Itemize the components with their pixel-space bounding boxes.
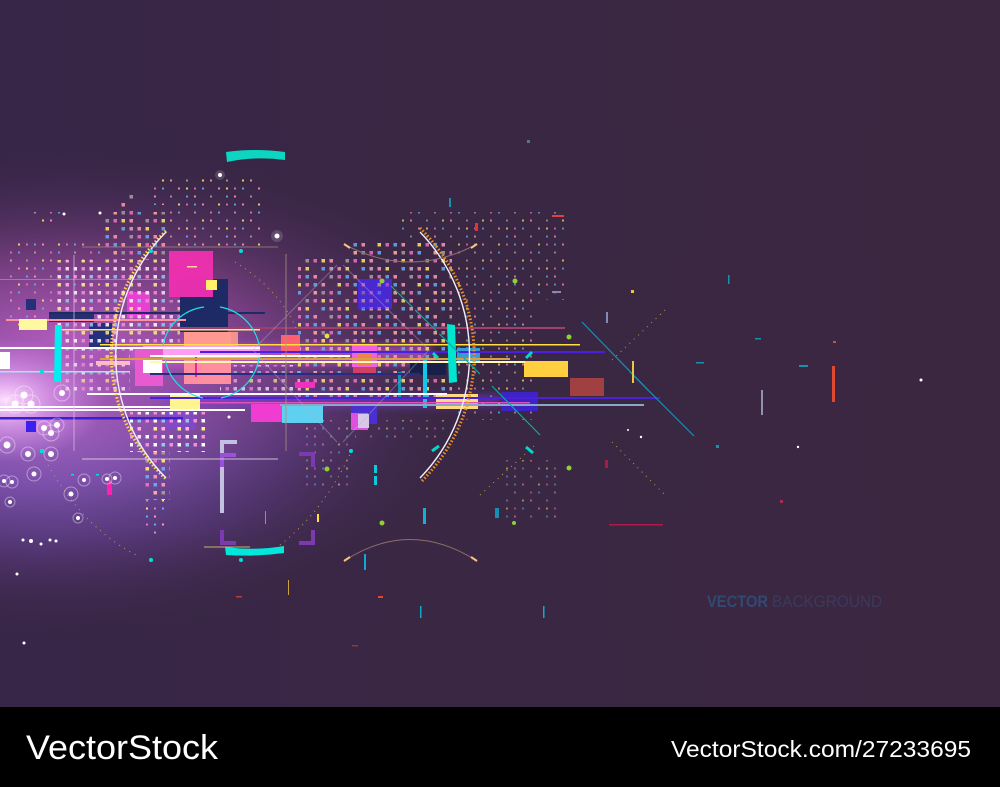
watermark footer band bbox=[0, 707, 1000, 787]
dot matrix: left cluster bbox=[10, 178, 300, 538]
right dashed arc bbox=[420, 228, 474, 482]
slogan text: VECTOR bbox=[707, 592, 768, 611]
bottom cyan arc bbox=[225, 546, 284, 556]
left white arc bbox=[116, 232, 166, 478]
corner brackets bbox=[222, 442, 313, 543]
scattered accent marks bbox=[236, 140, 836, 646]
upper inner arc bbox=[344, 244, 477, 262]
dot matrix: right cluster bbox=[298, 212, 565, 520]
cyan particles bbox=[40, 249, 353, 562]
top cyan arc bbox=[226, 150, 285, 162]
brand name: VectorStock bbox=[26, 729, 219, 767]
dotted outer arcs bbox=[48, 262, 665, 557]
slogan text bbox=[707, 592, 882, 611]
arc end caps bbox=[344, 244, 477, 561]
lower inner arc bbox=[344, 540, 477, 561]
right white arc bbox=[420, 232, 470, 478]
glowing particles bbox=[0, 170, 922, 644]
thin guide lines bbox=[74, 247, 429, 547]
left cyan bar bbox=[54, 325, 62, 382]
diagonal accent lines bbox=[391, 286, 694, 453]
left dashed arc bbox=[111, 231, 166, 479]
right cyan bar bbox=[447, 324, 457, 383]
image url: VectorStock.com/27233695 bbox=[671, 736, 971, 762]
horizontal glitch lines bbox=[0, 279, 660, 420]
HUD ring bbox=[48, 228, 665, 561]
glitch rectangles bbox=[0, 251, 604, 495]
slogan text: BACKGROUND bbox=[772, 592, 882, 611]
center cyan circle bbox=[163, 307, 259, 398]
